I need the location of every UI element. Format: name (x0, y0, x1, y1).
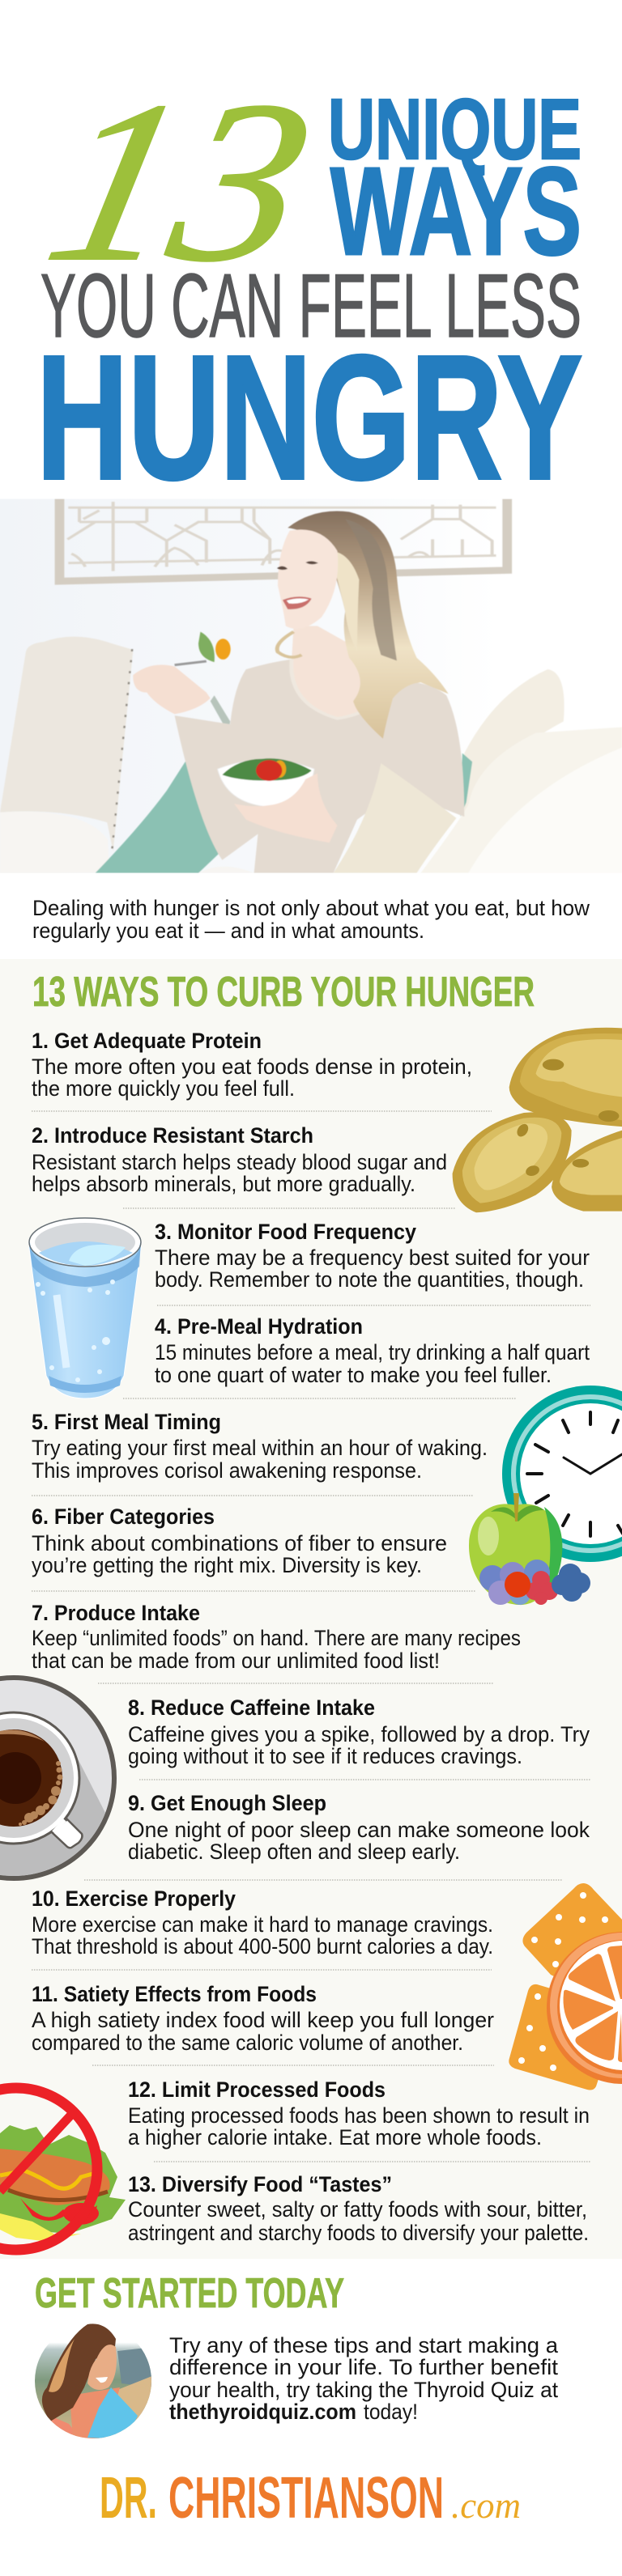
item 8: reduce caffeine intake: 8. Reduce Caffeine Intake (128, 1695, 375, 1720)
item 1: get adequate protein (32, 1029, 472, 1101)
hero photo: woman eating salad (0, 499, 622, 873)
icon: wall clock (502, 1386, 622, 1562)
item 8: reduce caffeine intake: going without it to see if it reduces cravings. (128, 1744, 522, 1768)
intro paragraph: Dealing with hunger is not only about what you eat, but how (32, 896, 590, 920)
item 4: pre-meal hydration: 15 minutes before a meal, try drinking a half quart (155, 1340, 590, 1364)
item 5: first meal timing: 5. First Meal Timing (32, 1410, 221, 1434)
closing paragraph: difference in your life. To further benefit (169, 2355, 559, 2379)
intro paragraph (32, 896, 590, 943)
item 6: fiber categories (32, 1504, 447, 1577)
item 8: reduce caffeine intake (128, 1695, 590, 1768)
logo: dr. christianson .com: .com (451, 2485, 521, 2526)
item 6: fiber categories: Think about combinations of fiber to ensure (32, 1531, 447, 1555)
item 7: produce intake (32, 1601, 521, 1673)
closing paragraph (169, 2333, 559, 2424)
item 12: limit processed foods (128, 2077, 590, 2149)
logo: dr. christianson .com (100, 2466, 521, 2531)
item 13: diversify food tastes: astringent and starchy foods to diversify your palette. (128, 2221, 589, 2245)
closing paragraph: today! (364, 2400, 418, 2424)
item 11: satiety effects from foods: compared to the same caloric volume of another. (32, 2031, 463, 2055)
icon: crossed-out hot dog (0, 2088, 126, 2250)
item 3: monitor food frequency (155, 1220, 590, 1292)
item 10: exercise properly: More exercise can make it hard to manage cravings. (32, 1912, 493, 1937)
item 3: monitor food frequency: There may be a frequency best suited for your (155, 1246, 590, 1270)
item 10: exercise properly (32, 1886, 493, 1959)
item 9: get enough sleep: 9. Get Enough Sleep (128, 1791, 326, 1815)
item 6: fiber categories: you’re getting the right mix. Diversity is key. (32, 1553, 422, 1577)
item 1: get adequate protein: the more quickly you feel full. (32, 1076, 295, 1101)
item 6: fiber categories: 6. Fiber Categories (32, 1504, 215, 1529)
title number 13: 13 (30, 54, 331, 309)
item 13: diversify food tastes: 13. Diversify Food “Tastes” (128, 2172, 392, 2196)
item 7: produce intake: that can be made from our unlimited food list! (32, 1649, 440, 1673)
item 5: first meal timing: This improves corisol awakening response. (32, 1458, 422, 1483)
closing paragraph: your health, try taking the Thyroid Quiz at (169, 2378, 559, 2402)
logo: dr. christianson .com: DR. (100, 2466, 157, 2531)
icon: potatoes (453, 1028, 622, 1212)
icon: apple and berries (469, 1493, 590, 1605)
closing paragraph: thethyroidquiz.com (169, 2400, 356, 2424)
item 9: get enough sleep: One night of poor sleep can make someone look (128, 1818, 590, 1842)
item 10: exercise properly: 10. Exercise Properly (32, 1886, 236, 1911)
intro paragraph: regularly you eat it — and in what amounts. (32, 919, 424, 943)
item 7: produce intake: Keep “unlimited foods” on hand. There are many recipes (32, 1626, 521, 1650)
item 4: pre-meal hydration (155, 1314, 590, 1387)
item 8: reduce caffeine intake: Caffeine gives you a spike, followed by a drop. Try (128, 1722, 590, 1746)
item 10: exercise properly: That threshold is about 400-500 burnt calories a day. (32, 1934, 493, 1959)
panel: 13 ways list background (0, 959, 622, 2259)
item 2: introduce resistant starch: helps absorb minerals, but more gradually. (32, 1172, 415, 1196)
icon: crackers and orange slice (509, 1883, 622, 2090)
item 13: diversify food tastes: Counter sweet, salty or fatty foods with sour, bitter, (128, 2197, 587, 2222)
item 1: get adequate protein: 1. Get Adequate Protein (32, 1029, 262, 1053)
item 4: pre-meal hydration: to one quart of water to make you feel fuller. (155, 1363, 552, 1387)
item 2: introduce resistant starch: Resistant starch helps steady blood sugar and (32, 1150, 447, 1174)
icon: glass of water (28, 1218, 142, 1398)
item 5: first meal timing (32, 1410, 488, 1483)
item 12: limit processed foods: 12. Limit Processed Foods (128, 2077, 386, 2102)
logo: dr. christianson .com: CHRISTIANSON (168, 2466, 444, 2531)
item 12: limit processed foods: a higher calorie intake. Eat more whole foods. (128, 2125, 542, 2149)
item 9: get enough sleep (128, 1791, 590, 1864)
item 5: first meal timing: Try eating your first meal within an hour of waking. (32, 1436, 488, 1460)
heading: get started today: GET STARTED TODAY (35, 2270, 344, 2317)
item 1: get adequate protein: The more often you eat foods dense in protein, (32, 1055, 472, 1079)
icon: coffee cup on saucer (0, 1678, 114, 1878)
item 3: monitor food frequency: 3. Monitor Food Frequency (155, 1220, 416, 1244)
item 13: diversify food tastes (128, 2172, 589, 2245)
item 2: introduce resistant starch: 2. Introduce Resistant Starch (32, 1123, 313, 1148)
item 2: introduce resistant starch (32, 1123, 447, 1196)
item 7: produce intake: 7. Produce Intake (32, 1601, 200, 1625)
closing paragraph: Try any of these tips and start making a (169, 2333, 558, 2357)
item 11: satiety effects from foods (32, 1982, 494, 2055)
item 11: satiety effects from foods: 11. Satiety Effects from Foods (32, 1982, 317, 2006)
title: 13 unique ways you can feel less hungry (30, 54, 582, 516)
item 9: get enough sleep: diabetic. Sleep often and sleep early. (128, 1840, 460, 1864)
item 3: monitor food frequency: body. Remember to note the quantities, though. (155, 1267, 584, 1292)
item 11: satiety effects from foods: A high satiety index food will keep you full longer (32, 2008, 494, 2032)
item 12: limit processed foods: Eating processed foods has been shown to result in (128, 2103, 590, 2128)
item 4: pre-meal hydration: 4. Pre-Meal Hydration (155, 1314, 363, 1339)
author photo (32, 2321, 154, 2439)
